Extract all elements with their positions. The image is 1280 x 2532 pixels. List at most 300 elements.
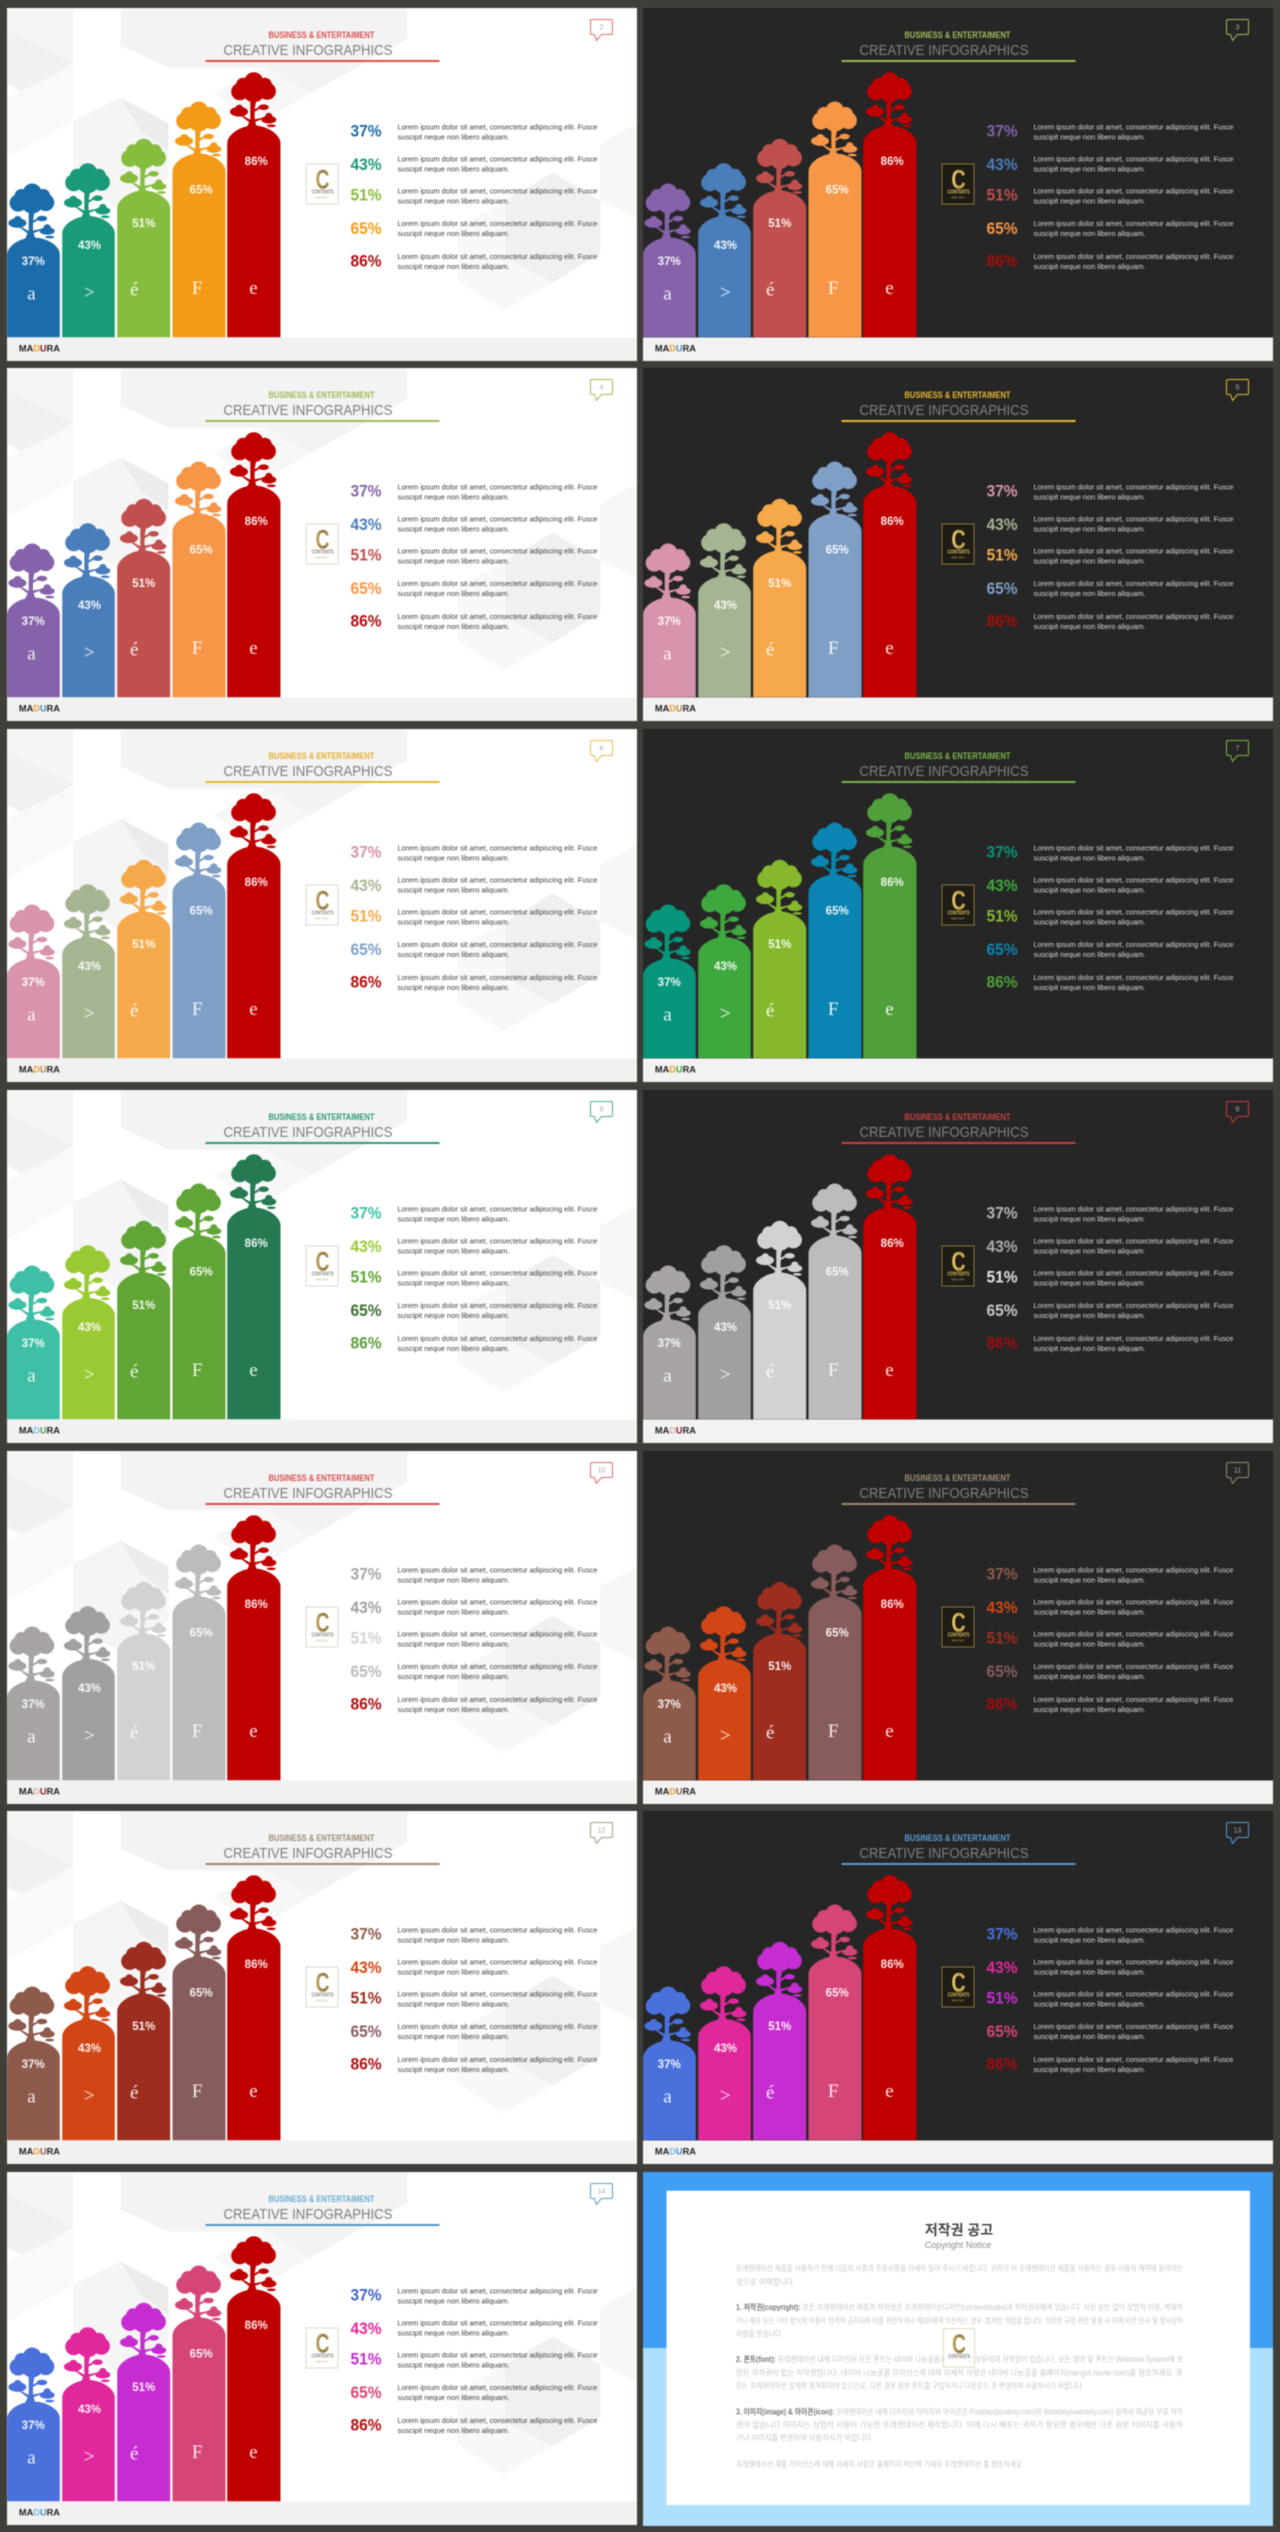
legend list: Lorem ipsum dolor sit amet, consectetur adipiscing elit. Fusce (397, 844, 597, 852)
slide 7: dark (642, 729, 1274, 1083)
logo: contents badge: MAIN TEXT (951, 195, 964, 199)
bar: 43%: 43% (77, 961, 101, 973)
slide 5: dark (642, 368, 1274, 722)
bar: 37% (7, 1626, 59, 1780)
legend list: Lorem ipsum dolor sit amet, consectetur adipiscing elit. Fusce (1033, 515, 1233, 524)
bar: 86%: 86% (244, 516, 267, 528)
logo: contents badge: MAIN TEXT (951, 1638, 964, 1642)
heading: BUSINESS & ENTERTAIMENT (268, 1472, 374, 1482)
bar: 43%: 43% (77, 2404, 101, 2416)
legend list: Lorem ipsum dolor sit amet, consectetur adipiscing elit. Fusce (397, 2383, 597, 2392)
bar: 65%: F (828, 638, 838, 659)
bar: 37%: a (663, 1726, 672, 1747)
icon: page number bubble: 6 (599, 746, 603, 752)
bar: 86%: e (249, 999, 257, 1020)
bar: 43%: 43% (714, 600, 737, 612)
bar: 43%: 43% (77, 600, 101, 612)
bar: 51%: 51% (132, 1660, 155, 1672)
heading (205, 1112, 439, 1143)
legend list: Lorem ipsum dolor sit amet, consectetur adipiscing elit. Fusce (1033, 908, 1233, 916)
legend list: 86% (986, 1694, 1017, 1713)
bar: 51%: é (129, 2444, 138, 2464)
slide 11: dark (642, 1451, 1274, 1805)
legend list: 51% (350, 1628, 381, 1647)
bar: 51% (117, 1942, 170, 2140)
legend list: 65% (350, 218, 381, 237)
icon: page number bubble: 8 (599, 1106, 603, 1113)
icon: page number bubble (590, 1462, 612, 1483)
heading: BUSINESS & ENTERTAIMENT (268, 390, 374, 400)
legend list: Lorem ipsum dolor sit amet, consectetur adipiscing elit. Fusce (397, 1301, 597, 1310)
legend list: 43% (986, 1958, 1017, 1977)
heading: CREATIVE INFOGRAPHICS (859, 403, 1028, 419)
bar: 86% (227, 793, 280, 1058)
legend list: 43% (350, 876, 381, 895)
bar: 65%: 65% (189, 2348, 212, 2360)
logo: contents badge: MAIN TEXT (315, 195, 328, 199)
legend list: Lorem ipsum dolor sit amet, consectetur adipiscing elit. Fusce (1033, 1565, 1233, 1574)
legend list: Lorem ipsum dolor sit amet, consectetur adipiscing elit. Fusce (397, 1926, 597, 1935)
slide 6: light (6, 728, 638, 1083)
bar: 43% (62, 2327, 114, 2501)
bar: 43% (62, 1245, 114, 1419)
legend list: suscipit neque non libero aliquam. (397, 1607, 509, 1616)
footer: brand: MADURA (18, 343, 60, 354)
legend list: Lorem ipsum dolor sit amet, consectetur adipiscing elit. Fusce (397, 1629, 597, 1638)
legend list: Lorem ipsum dolor sit amet, consectetur adipiscing elit. Fusce (397, 1990, 597, 1999)
bar: 51%: 51% (132, 578, 155, 590)
bar: 37%: a (27, 2448, 36, 2468)
logo: contents badge: CONTENTS (311, 189, 333, 195)
bar: 86%: 86% (880, 1959, 904, 1971)
bar: 37%: a (27, 1365, 36, 1386)
logo: contents badge: MAIN TEXT (315, 556, 328, 560)
bar: 43%: 43% (77, 1322, 101, 1334)
legend list: Lorem ipsum dolor sit amet, consectetur adipiscing elit. Fusce (397, 973, 597, 982)
notice body: 것으로 이해합니다. (736, 2276, 795, 2286)
bar: 43%: 43% (77, 2043, 101, 2055)
notice body: 프레젠테이션 제품 라이선스에 대해 자세히 사항은 홈페이지 하단에 기재된 프레젠테이션 를 참조하세요 (736, 2459, 1022, 2469)
legend list: 37% (350, 1925, 381, 1944)
footer: brand: MADURA (655, 1064, 696, 1076)
legend list: 65% (350, 579, 381, 598)
footer: brand: MADURA (655, 2147, 696, 2158)
bar: 43%: > (720, 2086, 730, 2107)
legend list (986, 482, 1233, 631)
bar: 65% (172, 1544, 225, 1780)
bar: 43%: > (83, 2446, 94, 2468)
legend list (986, 121, 1233, 270)
legend list: suscipit neque non libero aliquam. (397, 1968, 509, 1977)
bar: 51%: é (129, 279, 138, 300)
bar: 65% (808, 1544, 861, 1780)
bar: 86%: 86% (244, 2320, 267, 2332)
bar: 65%: F (828, 1720, 838, 1741)
legend list: suscipit neque non libero aliquam. (1033, 1344, 1145, 1353)
bar: 37%: a (663, 1365, 672, 1386)
legend list: suscipit neque non libero aliquam. (1033, 589, 1145, 598)
bar: 86%: e (249, 2081, 257, 2102)
bar: 37%: a (27, 283, 36, 304)
heading: CREATIVE INFOGRAPHICS (223, 2207, 392, 2223)
bar: 51%: é (129, 640, 138, 661)
legend list: suscipit neque non libero aliquam. (397, 1214, 509, 1223)
legend list: Lorem ipsum dolor sit amet, consectetur adipiscing elit. Fusce (397, 1204, 597, 1213)
bar: 65% (172, 101, 225, 337)
legend list: suscipit neque non libero aliquam. (397, 2360, 509, 2370)
heading: CREATIVE INFOGRAPHICS (223, 1846, 392, 1862)
bar: 65%: F (191, 999, 202, 1020)
legend list: suscipit neque non libero aliquam. (1033, 1278, 1145, 1287)
legend list: suscipit neque non libero aliquam. (397, 132, 509, 141)
bar: 86%: e (885, 999, 894, 1020)
bar: 51% (117, 138, 170, 337)
heading: BUSINESS & ENTERTAIMENT (268, 29, 374, 39)
bar: 43%: 43% (77, 239, 101, 251)
legend list (986, 842, 1233, 992)
legend list: suscipit neque non libero aliquam. (1033, 1246, 1145, 1255)
slide 8: light (6, 1089, 638, 1444)
legend list: 43% (986, 515, 1017, 534)
footer: brand: MADURA (655, 704, 696, 715)
legend list: Lorem ipsum dolor sit amet, consectetur adipiscing elit. Fusce (397, 252, 597, 260)
logo: contents badge (306, 1967, 338, 2007)
legend list: 43% (986, 154, 1017, 173)
legend list: Lorem ipsum dolor sit amet, consectetur adipiscing elit. Fusce (1033, 218, 1233, 228)
legend list: suscipit neque non libero aliquam. (397, 2065, 509, 2074)
bar: 43%: 43% (77, 1682, 101, 1694)
bar: 43% (62, 163, 114, 337)
logo: contents badge (944, 2328, 974, 2367)
legend list: 65% (350, 2022, 381, 2041)
logo: contents badge: CONTENTS (311, 1632, 333, 1638)
heading: CREATIVE INFOGRAPHICS (859, 764, 1028, 780)
icon: page number bubble: 3 (1235, 24, 1239, 31)
legend list: Lorem ipsum dolor sit amet, consectetur adipiscing elit. Fusce (397, 483, 597, 492)
footer: brand: MADURA (655, 343, 696, 354)
legend list: 86% (350, 612, 381, 631)
icon: page number bubble (1226, 1823, 1248, 1844)
bar: 65%: 65% (189, 1627, 212, 1639)
logo: contents badge: CONTENTS (311, 550, 333, 556)
legend list: 65% (350, 940, 381, 959)
legend list: 86% (986, 251, 1017, 270)
legend list: suscipit neque non libero aliquam. (1033, 1968, 1145, 1977)
legend list: Lorem ipsum dolor sit amet, consectetur adipiscing elit. Fusce (397, 876, 597, 884)
legend list: Lorem ipsum dolor sit amet, consectetur adipiscing elit. Fusce (1033, 1629, 1233, 1638)
bar: 43% (62, 1606, 114, 1780)
heading (205, 390, 439, 421)
icon: page number bubble: 9 (1235, 1106, 1239, 1113)
slide 13: dark (642, 1811, 1274, 2165)
heading: CREATIVE INFOGRAPHICS (223, 403, 392, 419)
bar: 51%: é (129, 1000, 138, 1022)
bar: 37% (7, 183, 59, 337)
legend list: Lorem ipsum dolor sit amet, consectetur adipiscing elit. Fusce (1033, 154, 1233, 163)
legend list: 51% (350, 546, 381, 565)
bar: 43% (698, 1245, 751, 1419)
legend list (350, 1564, 597, 1714)
legend list (986, 1564, 1233, 1714)
bar: 51% (117, 1221, 170, 1419)
logo: contents badge: MAIN TEXT (315, 1999, 328, 2003)
icon: page number bubble (590, 19, 612, 40)
bar: 37% (643, 544, 696, 697)
icon: page number bubble: 11 (1234, 1467, 1241, 1474)
bar: 37% (643, 1987, 696, 2140)
legend list: 37% (350, 2286, 381, 2304)
bar: 65%: F (828, 2081, 838, 2102)
heading: BUSINESS & ENTERTAIMENT (268, 2194, 374, 2204)
legend list: 65% (986, 1301, 1017, 1320)
heading: CREATIVE INFOGRAPHICS (859, 42, 1028, 58)
bar: 65% (808, 101, 861, 337)
bar: 51%: 51% (768, 2021, 791, 2033)
bar: 37%: 37% (21, 616, 44, 628)
legend list: suscipit neque non libero aliquam. (397, 2393, 509, 2402)
bar: 51%: é (129, 2083, 138, 2104)
legend list: suscipit neque non libero aliquam. (397, 1672, 509, 1680)
notice body: 1. 저작권(copyright): 모든 프레젠테이션 제품의 저작권은 프레젠테이션디자인(contentstudio)과 저작권자에게 있습니다. 사전 승인 없이 상업적 이용, 복제하 (736, 2302, 1184, 2312)
legend list: Lorem ipsum dolor sit amet, consectetur adipiscing elit. Fusce (1033, 1958, 1233, 1967)
bar: 86%: 86% (244, 155, 267, 167)
legend list: suscipit neque non libero aliquam. (397, 2000, 509, 2009)
logo: contents badge (306, 885, 338, 925)
legend list: Lorem ipsum dolor sit amet, consectetur adipiscing elit. Fusce (397, 2022, 597, 2031)
legend list: 43% (350, 154, 381, 173)
legend list: 65% (350, 2383, 381, 2402)
legend list: suscipit neque non libero aliquam. (1033, 2000, 1145, 2009)
footer: brand (6, 337, 636, 360)
legend list: suscipit neque non libero aliquam. (1033, 950, 1145, 959)
legend list: suscipit neque non libero aliquam. (397, 1575, 509, 1584)
heading: BUSINESS & ENTERTAIMENT (904, 751, 1011, 761)
icon: page number bubble: 7 (1235, 746, 1239, 752)
bar: 43% (62, 884, 114, 1058)
footer: brand (643, 1419, 1273, 1443)
legend list: Lorem ipsum dolor sit amet, consectetur adipiscing elit. Fusce (1033, 186, 1233, 195)
bar: 86% (863, 1515, 916, 1780)
logo: contents badge (306, 1246, 338, 1286)
bar: 37% (643, 183, 696, 337)
legend list: suscipit neque non libero aliquam. (397, 493, 509, 502)
legend list: 65% (986, 2022, 1017, 2041)
heading: BUSINESS & ENTERTAIMENT (904, 1472, 1011, 1482)
bar: 65% (172, 2266, 225, 2501)
legend list: Lorem ipsum dolor sit amet, consectetur adipiscing elit. Fusce (397, 1662, 597, 1670)
bar: 37%: a (663, 644, 672, 665)
footer: brand (6, 698, 636, 721)
bar: 65%: 65% (825, 906, 849, 918)
legend list: Lorem ipsum dolor sit amet, consectetur adipiscing elit. Fusce (1033, 1694, 1233, 1704)
legend list: Lorem ipsum dolor sit amet, consectetur adipiscing elit. Fusce (1033, 122, 1233, 131)
panel: copyright notice (642, 2171, 1274, 2527)
logo: contents badge: C (315, 1607, 329, 1637)
footer: brand (643, 1058, 1273, 1082)
footer: brand: MADURA (18, 1064, 60, 1076)
legend list: suscipit neque non libero aliquam. (1033, 1704, 1145, 1714)
bar: 65%: 65% (825, 545, 849, 557)
legend list: 43% (350, 1237, 381, 1256)
legend list: Lorem ipsum dolor sit amet, consectetur adipiscing elit. Fusce (1033, 579, 1233, 588)
bar: 51%: 51% (132, 2021, 155, 2033)
bar: 86%: e (885, 638, 894, 659)
legend list: Lorem ipsum dolor sit amet, consectetur adipiscing elit. Fusce (397, 612, 597, 621)
legend list: 51% (986, 185, 1017, 204)
bar: 65% (172, 822, 225, 1058)
legend list: Lorem ipsum dolor sit amet, consectetur adipiscing elit. Fusce (1033, 1990, 1233, 1999)
legend list: suscipit neque non libero aliquam. (397, 1278, 509, 1287)
logo: contents badge: MAIN TEXT (951, 1999, 964, 2003)
bar: 86% (227, 432, 280, 697)
heading (841, 1112, 1075, 1143)
icon: page number bubble: 4 (599, 385, 603, 392)
bar: 43%: 43% (714, 2043, 737, 2055)
legend list: Lorem ipsum dolor sit amet, consectetur adipiscing elit. Fusce (397, 579, 597, 588)
bar: 37%: a (663, 2087, 672, 2108)
icon: page number bubble (1226, 740, 1248, 762)
bar: 37%: 37% (657, 2059, 681, 2071)
slide 10: light (6, 1450, 638, 1805)
logo: contents badge: MAIN TEXT (315, 1277, 328, 1281)
legend list: Lorem ipsum dolor sit amet, consectetur adipiscing elit. Fusce (1033, 973, 1233, 982)
legend list: Lorem ipsum dolor sit amet, consectetur adipiscing elit. Fusce (397, 1597, 597, 1606)
logo: contents badge (306, 2328, 338, 2368)
footer: brand (643, 1780, 1273, 1804)
heading: CREATIVE INFOGRAPHICS (223, 42, 392, 58)
legend list: 51% (986, 1628, 1017, 1647)
bar: 65%: F (191, 277, 202, 298)
legend list: suscipit neque non libero aliquam. (397, 589, 509, 598)
heading: BUSINESS & ENTERTAIMENT (904, 1833, 1011, 1843)
bar: 43% (698, 1606, 751, 1780)
legend list: suscipit neque non libero aliquam. (397, 854, 509, 862)
bar: 43%: > (83, 1725, 94, 1746)
legend list: Lorem ipsum dolor sit amet, consectetur adipiscing elit. Fusce (1033, 1204, 1233, 1213)
icon: page number bubble: 12 (597, 1828, 605, 1835)
legend list: 86% (350, 2416, 381, 2434)
legend list: suscipit neque non libero aliquam. (1033, 1607, 1145, 1616)
legend list: suscipit neque non libero aliquam. (397, 1344, 509, 1353)
logo: contents badge (942, 1246, 974, 1286)
legend list: 37% (986, 1564, 1017, 1583)
bar: 86% (227, 2236, 280, 2501)
logo: contents badge: CONTENTS (311, 1993, 333, 1999)
legend list (350, 1203, 597, 1353)
bar: 37% (643, 1265, 696, 1419)
logo: contents badge: CONTENTS (311, 910, 333, 916)
bar: 37% (7, 1265, 59, 1419)
legend list: Lorem ipsum dolor sit amet, consectetur adipiscing elit. Fusce (397, 940, 597, 949)
footer: brand (6, 2141, 636, 2164)
logo: contents badge: CONTENTS (948, 2354, 970, 2360)
bar: 37%: 37% (21, 255, 44, 267)
legend list: 65% (986, 940, 1017, 959)
bar: 51%: é (129, 1361, 138, 1382)
bar: 37%: 37% (21, 1338, 44, 1350)
bar: 43%: 43% (714, 1682, 737, 1694)
logo: contents badge: CONTENTS (947, 910, 970, 916)
bar: 51%: é (766, 1000, 774, 1022)
icon: page number bubble: 14 (597, 2188, 605, 2196)
logo: contents badge: CONTENTS (947, 550, 970, 556)
bar: 65% (808, 462, 861, 697)
legend list: suscipit neque non libero aliquam. (1033, 918, 1145, 926)
bar: 37% (7, 1987, 59, 2140)
bar: 43% (62, 1966, 114, 2140)
legend list: suscipit neque non libero aliquam. (397, 2426, 509, 2435)
legend list: Lorem ipsum dolor sit amet, consectetur adipiscing elit. Fusce (397, 1334, 597, 1343)
legend list: Lorem ipsum dolor sit amet, consectetur adipiscing elit. Fusce (397, 1565, 597, 1574)
heading: BUSINESS & ENTERTAIMENT (268, 1833, 374, 1843)
bar: 43%: > (720, 1364, 730, 1385)
legend list: suscipit neque non libero aliquam. (397, 622, 509, 631)
legend list: 86% (350, 251, 381, 270)
bar: 51%: 51% (768, 217, 791, 229)
heading: CREATIVE INFOGRAPHICS (859, 1846, 1028, 1862)
bar: 86%: e (885, 1360, 894, 1381)
bar: 43%: > (83, 282, 94, 303)
bar: 51% (117, 860, 170, 1058)
logo: contents badge (306, 1606, 338, 1646)
bar: 51%: é (766, 1722, 774, 1743)
icon: page number bubble (590, 1101, 612, 1122)
footer: brand (643, 698, 1273, 721)
bar: 86%: e (249, 2442, 257, 2463)
bar: 65% (808, 1905, 861, 2140)
legend list: Lorem ipsum dolor sit amet, consectetur adipiscing elit. Fusce (1033, 2055, 1233, 2064)
legend list: Lorem ipsum dolor sit amet, consectetur adipiscing elit. Fusce (397, 1268, 597, 1277)
heading: BUSINESS & ENTERTAIMENT (904, 390, 1011, 400)
legend list: 37% (986, 1203, 1017, 1222)
notice body: 트는 프레젠테이션 설계에 최적화되어 있으므로, 다른 경우 원본 폰트를 구입하거나 다운로드 후 변경하여 사용하시기 바랍니다. (736, 2380, 1084, 2390)
heading (205, 1833, 439, 1864)
bar: 65%: F (191, 1720, 202, 1741)
bar: 86%: 86% (244, 1598, 267, 1610)
bar: 37%: 37% (657, 977, 681, 989)
legend list: Lorem ipsum dolor sit amet, consectetur adipiscing elit. Fusce (1033, 612, 1233, 621)
notice body: 3. 이미지(image) & 아이콘(icon): 프레젠테이션 내에 디자인된 이미지와 아이콘은 Pixabay(pixabay.com)와 Webdaly(webdaly.com) 등에서 제공된 무료 저작 (736, 2406, 1184, 2416)
bar: 51%: é (766, 1361, 774, 1382)
bar: 86%: e (249, 638, 257, 659)
legend list (350, 2286, 597, 2435)
bar: 51%: 51% (768, 939, 791, 951)
logo: contents badge: C (315, 1968, 329, 1998)
logo: contents badge: C (315, 164, 329, 194)
legend list: 43% (986, 1597, 1017, 1616)
legend list: suscipit neque non libero aliquam. (1033, 2032, 1145, 2041)
bar: 65%: 65% (189, 1266, 212, 1278)
legend list: 86% (350, 1333, 381, 1352)
slide 2: light (6, 7, 638, 362)
bar: 43% (698, 884, 751, 1058)
legend list: Lorem ipsum dolor sit amet, consectetur adipiscing elit. Fusce (397, 515, 597, 524)
slide 9: dark (642, 1090, 1274, 1444)
legend list: Lorem ipsum dolor sit amet, consectetur adipiscing elit. Fusce (397, 2318, 597, 2328)
legend list: suscipit neque non libero aliquam. (1033, 1639, 1145, 1648)
icon: page number bubble (590, 740, 612, 762)
legend list: Lorem ipsum dolor sit amet, consectetur adipiscing elit. Fusce (1033, 1662, 1233, 1670)
legend list: suscipit neque non libero aliquam. (397, 950, 509, 959)
footer: brand (6, 1419, 636, 1443)
legend list: Lorem ipsum dolor sit amet, consectetur adipiscing elit. Fusce (1033, 2022, 1233, 2031)
bar: 51%: 51% (768, 578, 791, 590)
legend list: 51% (350, 1989, 381, 2008)
legend list (986, 1925, 1233, 2074)
bar: 51% (753, 1581, 806, 1780)
legend list: 86% (986, 1333, 1017, 1352)
legend list (986, 1203, 1233, 1353)
